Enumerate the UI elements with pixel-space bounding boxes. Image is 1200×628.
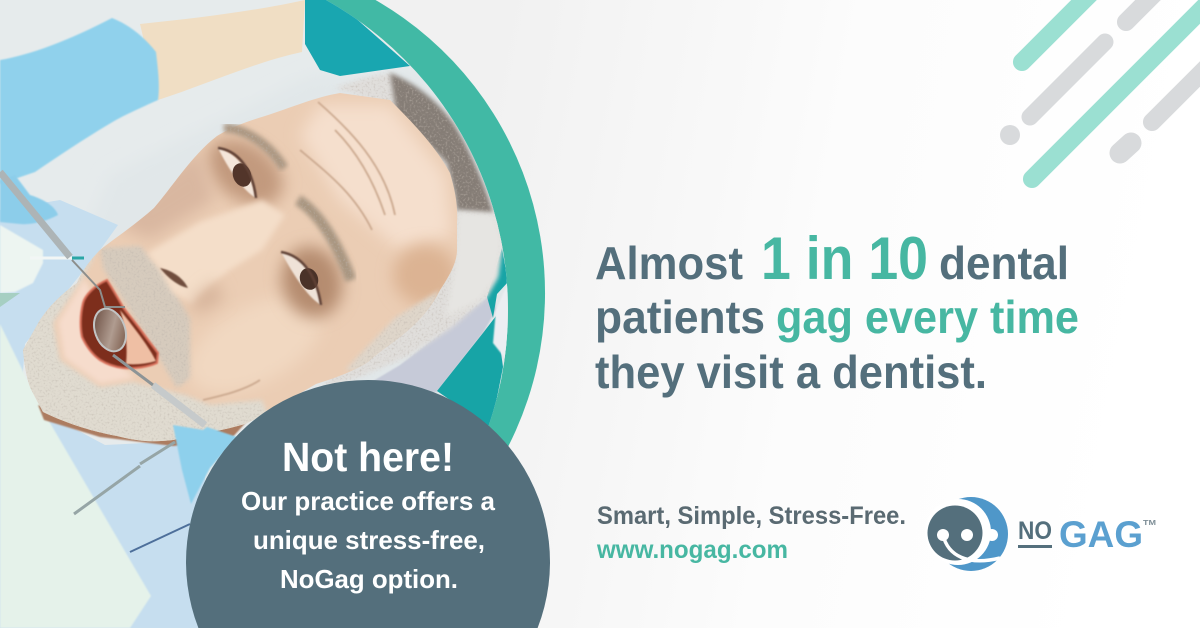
upper dental tool bbox=[0, 172, 125, 307]
nose underside shadow bbox=[190, 282, 224, 314]
pale cloth at left bbox=[0, 225, 43, 293]
main headline: they visit a dentist. bbox=[595, 346, 987, 398]
main headline: Almost bbox=[595, 237, 743, 289]
teal ring behind the photo bbox=[300, 0, 545, 460]
callout heading: Not here! bbox=[282, 434, 454, 480]
trademark: TM bbox=[1143, 520, 1156, 527]
callout body bbox=[241, 486, 496, 594]
NoGag logo bbox=[925, 497, 1156, 571]
face bbox=[23, 93, 458, 442]
decorative diagonal bars bbox=[1000, 0, 1200, 188]
white hair patch bbox=[445, 212, 502, 318]
callout body: NoGag option. bbox=[280, 564, 458, 594]
photo backdrop bbox=[0, 0, 508, 480]
upper eye socket bbox=[202, 133, 290, 207]
photo: patient at the dentist bbox=[0, 0, 520, 628]
lower eye bbox=[281, 252, 321, 305]
base skin bbox=[23, 93, 458, 442]
cheek bbox=[194, 302, 316, 390]
forehead highlight bbox=[300, 105, 452, 250]
callout body: Our practice offers a bbox=[241, 486, 496, 516]
shaded side of nose bbox=[126, 156, 212, 240]
surgical teal garment, top bbox=[305, 0, 410, 76]
main headline: patients bbox=[595, 291, 765, 343]
logo word GAG: GAG bbox=[1059, 514, 1143, 555]
callout circle bbox=[186, 380, 550, 628]
upper brow bbox=[224, 128, 284, 168]
lower dental tool bbox=[113, 355, 205, 425]
stubble at hairline bbox=[345, 290, 440, 372]
dark hair band bbox=[390, 73, 493, 213]
blue glove, top left bbox=[0, 18, 159, 184]
hair bbox=[320, 73, 502, 390]
logo word NO: NO bbox=[1018, 517, 1052, 545]
upper lip and teeth bbox=[120, 310, 156, 364]
temple warmth bbox=[393, 245, 457, 305]
main headline: dental bbox=[939, 237, 1069, 289]
chest bib bbox=[0, 324, 151, 628]
website: www.nogag.com bbox=[596, 536, 788, 564]
white sheet sliver bbox=[493, 283, 508, 362]
teal garment, right sliver bbox=[487, 248, 508, 318]
neck shadow under the beard bbox=[38, 405, 250, 446]
assistant arm bbox=[140, 0, 305, 100]
main headline: 1 in 10 bbox=[761, 225, 928, 292]
patient shirt bbox=[0, 200, 205, 628]
lower brow bbox=[298, 200, 351, 280]
logo mark bbox=[925, 497, 1008, 571]
glove fingers bbox=[0, 175, 58, 224]
nose bbox=[147, 200, 285, 304]
main headline: gag every time bbox=[776, 291, 1079, 343]
upper eye bbox=[218, 148, 256, 198]
small instrument on tray bbox=[42, 256, 72, 260]
moustache bbox=[100, 246, 190, 388]
headrest bbox=[412, 67, 508, 404]
callout body: unique stress-free, bbox=[253, 525, 485, 555]
pillow right of head bbox=[374, 298, 496, 392]
chain and clip bbox=[74, 442, 175, 514]
tagline: Smart, Simple, Stress-Free. bbox=[597, 502, 906, 530]
skin around the lips bbox=[58, 278, 135, 384]
lower blue glove bbox=[173, 425, 237, 504]
nostril bbox=[160, 268, 188, 288]
teal garment, lower right bbox=[437, 316, 503, 428]
green fold of cloth bbox=[0, 293, 20, 307]
beard around chin bbox=[23, 256, 268, 442]
dental mirror bbox=[88, 304, 132, 356]
mouth bbox=[81, 280, 158, 368]
forehead and cheek wrinkles bbox=[203, 102, 395, 400]
shirt placket line bbox=[130, 524, 190, 552]
main headline bbox=[595, 225, 1079, 398]
lower eye socket bbox=[274, 239, 350, 325]
